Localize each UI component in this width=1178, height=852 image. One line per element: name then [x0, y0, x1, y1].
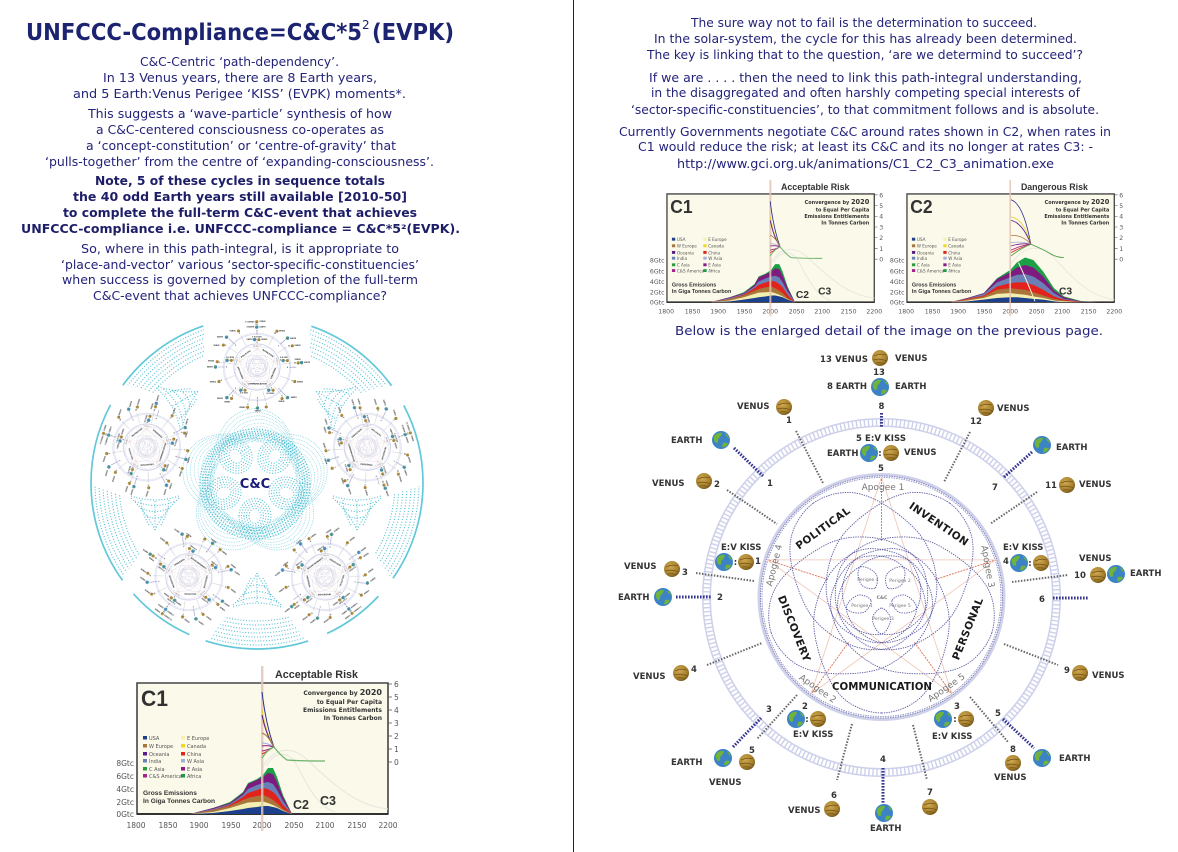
station: E:V KISS 4: E:V KISS: [1003, 543, 1043, 553]
station: Earth 3 and Venus 5: VENUS: [709, 778, 742, 788]
station: E:V KISS 2: :: [805, 715, 809, 725]
perigee labels: Perigee 2: [889, 578, 911, 584]
station: Venus 9: VENUS: [1092, 671, 1125, 681]
text block: bold note: UNFCCC-compliance i.e. UNFCCC-compliance = C&C*5²(EVPK).: [21, 222, 460, 236]
title: (EVPK): [372, 20, 454, 46]
station: Venus 6: 6: [831, 791, 837, 801]
sector labels: DISCOVERY: [775, 594, 813, 664]
text block: determination: The key is linking that to the question, ‘are we determind to succeed’?: [646, 47, 1083, 62]
station: E:V KISS 3: E:V KISS: [932, 732, 972, 742]
station: E:V KISS 3: 3: [954, 702, 960, 712]
mini wheel: left: [87, 381, 207, 509]
text block: determination: The sure way not to fail is the determination to succeed.: [690, 15, 1037, 30]
station: Earth 7: 7: [992, 483, 998, 493]
station: 5 E:V KISS: [827, 434, 937, 474]
central dotted wave band: [171, 409, 339, 569]
page divider: [572, 0, 574, 852]
perigee labels: Perigee 5: [889, 603, 911, 609]
station: Venus 12: VENUS: [997, 404, 1030, 414]
station: Venus 4: [633, 643, 762, 682]
text block: bold note: [21, 174, 460, 236]
station: Venus 9: 9: [1064, 666, 1070, 676]
apogee labels: Apogee 1: [862, 483, 904, 493]
text block: bold note: the 40 odd Earth years still available [2010-50]: [73, 190, 407, 204]
station: Venus 3: [624, 561, 754, 581]
station: Venus 11: 11: [1045, 481, 1057, 491]
title: UNFCCC-Compliance=C&C*5: [26, 20, 362, 46]
central dotted lobes: [202, 433, 308, 534]
station: 5 E:V KISS: EARTH: [827, 449, 858, 459]
station: Earth 3 and Venus 5: EARTH: [671, 758, 702, 768]
inner ring: [759, 474, 1004, 720]
station: Venus 10 and Earth: EARTH: [1130, 569, 1161, 579]
text block: rates and link: Currently Governments negotiate C&C around rates shown in C2, when rates in: [619, 124, 1111, 139]
perigee labels: C&C: [877, 595, 888, 601]
mini wheel: lower left: [118, 508, 256, 644]
text block: path dependency intro: In 13 Venus years, there are 8 Earth years,: [103, 70, 377, 85]
caption: Below is the enlarged detail of the image on the previous page.: [675, 323, 1103, 338]
station: E:V KISS 1: [715, 543, 761, 571]
station: Earth 5: 5: [995, 709, 1001, 719]
station: Earth 1: EARTH: [671, 436, 702, 446]
station: Earth 5: EARTH: [1059, 754, 1090, 764]
pentagram lines: [767, 477, 996, 694]
large Venus Earth cycle wheel: [618, 350, 1161, 834]
text block: closing question: ‘place-and-vector’ various ‘sector-specific-constituencies’: [61, 257, 419, 272]
station: Venus 1: [737, 399, 823, 483]
text block: wave-particle synthesis: This suggests a ‘wave-particle’ synthesis of how: [87, 106, 392, 121]
title: 2: [362, 18, 370, 32]
station: Venus 6: [788, 724, 852, 817]
text block: wave-particle synthesis: a ‘concept-constitution’ or ‘centre-of-gravity’ that: [86, 138, 396, 153]
text block: path-integral understanding: in the disaggregated and often harshly competing special interests of: [651, 85, 1081, 100]
station: Venus 11: [990, 477, 1112, 524]
chart: C2 dangerous risk, small: [890, 180, 1123, 316]
text block: wave-particle synthesis: [45, 106, 434, 169]
outer ring: [706, 422, 1056, 772]
station: Earth 2: EARTH: [618, 593, 649, 603]
station: Venus 7: 7: [927, 788, 933, 798]
apogee labels: [765, 483, 996, 706]
circular C&C diagram: [76, 310, 438, 654]
outer solid edge arcs: [91, 317, 423, 649]
station: E:V KISS 4: [1003, 543, 1049, 572]
station: Venus 12: [944, 400, 1030, 482]
station: E:V KISS 4: 4: [1003, 557, 1009, 567]
text block: determination: In the solar-system, the cycle for this has already been determined.: [654, 31, 1077, 46]
station: 13 Venus: VENUS: [895, 354, 928, 364]
station: E:V KISS 2: 2: [802, 702, 808, 712]
station: Venus 2: [652, 473, 777, 524]
station: Earth 1: [671, 431, 773, 489]
text block: path dependency intro: C&C-Centric ‘path-dependency’.: [140, 54, 339, 69]
station: E:V KISS 1: 1: [755, 557, 761, 567]
text block: bold note: to complete the full-term C&C-event that achieves: [63, 206, 417, 220]
text block: wave-particle synthesis: a C&C-centered consciousness co-operates as: [96, 122, 384, 137]
perigee labels: Perigee 1: [851, 603, 873, 609]
apogee labels: Apogee 3: [978, 545, 996, 589]
station: 13 Venus: [820, 350, 928, 378]
chart: C1 acceptable risk, large: [116, 666, 399, 831]
station: 8 Earth: EARTH: [895, 382, 926, 392]
sector labels: POLITICAL: [794, 505, 853, 552]
station: Earth 3 and Venus 5: 3: [766, 705, 772, 715]
mini wheel: right: [309, 385, 429, 512]
dotted triangular fans: [131, 371, 381, 607]
text block: rates and link: C1 would reduce the risk; at least its C&C and its no longer at rates C3: -: [638, 139, 1093, 154]
station: 8 Earth: 8: [879, 402, 885, 412]
station: E:V KISS 1: :: [734, 558, 737, 568]
sector labels: INVENTION: [907, 500, 971, 549]
station: Venus 4: 4: [691, 665, 697, 675]
white gaps between arcs: [76, 310, 438, 654]
station: 5 E:V KISS: 5: [878, 464, 884, 474]
station: 5 E:V KISS: :: [878, 449, 882, 459]
station: Earth 2: [618, 588, 723, 606]
station: Venus 2: VENUS: [652, 479, 685, 489]
station: Earth 6: 6: [1039, 595, 1045, 605]
station: Venus 9: [1004, 644, 1125, 681]
text block: path-integral understanding: ‘sector-specific-constituencies’, to that commitment follows and is absolute.: [631, 102, 1099, 117]
station: Venus 10 and Earth: 10: [1074, 571, 1086, 581]
station: Earth 1: 1: [767, 479, 773, 489]
station: Earth 5: [995, 709, 1090, 767]
station: 5 E:V KISS: 5 E:V KISS: [856, 434, 906, 444]
sector labels: PERSONAL: [950, 596, 986, 662]
text block: path dependency intro: [73, 54, 406, 101]
station: Venus 12: 12: [970, 417, 982, 427]
chart: C2 dangerous risk, small: C2: [910, 197, 933, 217]
station: Earth 7: EARTH: [1056, 443, 1087, 453]
station: Earth 4: EARTH: [870, 824, 901, 834]
text block: closing question: So, where in this path-integral, is it appropriate to: [81, 241, 399, 256]
text block: closing question: C&C-event that achieves UNFCCC-compliance?: [93, 288, 387, 303]
text block: wave-particle synthesis: ‘pulls-together’ from the centre of ‘expanding-consciousness’.: [45, 154, 434, 169]
station: Earth 4: 4: [880, 755, 886, 765]
station: Venus 10 and Earth: [1012, 554, 1161, 583]
text block: path dependency intro: and 5 Earth:Venus Perigee ‘KISS’ (EVPK) moments*.: [73, 86, 406, 101]
station: Venus 7: [913, 725, 938, 815]
station: Earth 4: [870, 755, 901, 834]
text block: path-integral understanding: If we are . . . . then the need to link this path-integral understanding,: [649, 70, 1082, 85]
perigee labels: Perigee 4: [857, 577, 879, 583]
station: Venus 1: VENUS: [737, 402, 770, 412]
text block: path-integral understanding: [631, 70, 1099, 117]
text block: bold note: Note, 5 of these cycles in sequence totals: [95, 174, 385, 188]
sector labels: [775, 500, 986, 693]
Venus path spirograph: [697, 426, 1056, 782]
text block: closing question: [61, 241, 419, 303]
station: Venus 2: 2: [714, 480, 720, 490]
text block: closing question: when success is governed by completion of the full-term: [62, 272, 418, 287]
station: 13 Venus: 13: [873, 368, 885, 378]
station: 8 Earth: 8 EARTH: [827, 382, 867, 392]
station: Venus 4: VENUS: [633, 672, 666, 682]
perigee labels: Perigee 3: [872, 616, 894, 622]
chart: C2 dangerous risk, small: Dangerous Risk: [1021, 182, 1089, 192]
apogee labels: Apogee 4: [765, 543, 785, 587]
station: E:V KISS 3: [932, 702, 974, 742]
station: 5 E:V KISS: VENUS: [904, 448, 937, 458]
chart: C1 acceptable risk, small: [650, 180, 883, 316]
station: E:V KISS 3: :: [953, 715, 957, 725]
station: E:V KISS 2: [787, 702, 833, 740]
sector labels: COMMUNICATION: [832, 681, 932, 693]
station: Earth 3 and Venus 5: 5: [749, 746, 755, 756]
station: E:V KISS 4: :: [1028, 559, 1032, 569]
central dense ring: [200, 429, 310, 539]
station: E:V KISS 1: E:V KISS: [721, 543, 761, 553]
station: 13 Venus: 13 VENUS: [820, 355, 868, 365]
apogee labels: Apogee 2: [797, 673, 838, 706]
outer dotted arcs: [95, 321, 419, 645]
station: Venus 8: [970, 697, 1027, 783]
text block: determination: [646, 15, 1083, 62]
station: Venus 3: 3: [682, 568, 688, 578]
mini wheel: top: [207, 320, 311, 412]
station: Venus 10 and Earth: VENUS: [1079, 554, 1112, 564]
mini wheel: lower right: [255, 511, 393, 646]
station: Venus 6: VENUS: [788, 806, 821, 816]
station: 8 Earth: [827, 378, 926, 428]
station: Venus 3: VENUS: [624, 562, 657, 572]
station: Earth 3 and Venus 5: [671, 695, 797, 788]
text block: rates and link: http://www.gci.org.uk/animations/C1_C2_C3_animation.exe: [677, 156, 1054, 171]
station: Venus 8: VENUS: [994, 773, 1027, 783]
station: Earth 6: [1039, 595, 1089, 605]
chart: C2 dangerous risk, small: C3: [1059, 287, 1072, 298]
station: Venus 1: 1: [786, 416, 792, 426]
apogee labels: Apogee 5: [926, 672, 967, 705]
station: Venus 11: VENUS: [1079, 480, 1112, 490]
station: Earth 7: [992, 436, 1087, 493]
text block: rates and link: [619, 124, 1111, 171]
perigee labels: [851, 577, 911, 622]
C&C centre label: C&C: [240, 477, 270, 492]
station: Venus 8: 8: [1010, 745, 1016, 755]
station: E:V KISS 2: E:V KISS: [793, 730, 833, 740]
station: Earth 2: 2: [717, 593, 723, 603]
